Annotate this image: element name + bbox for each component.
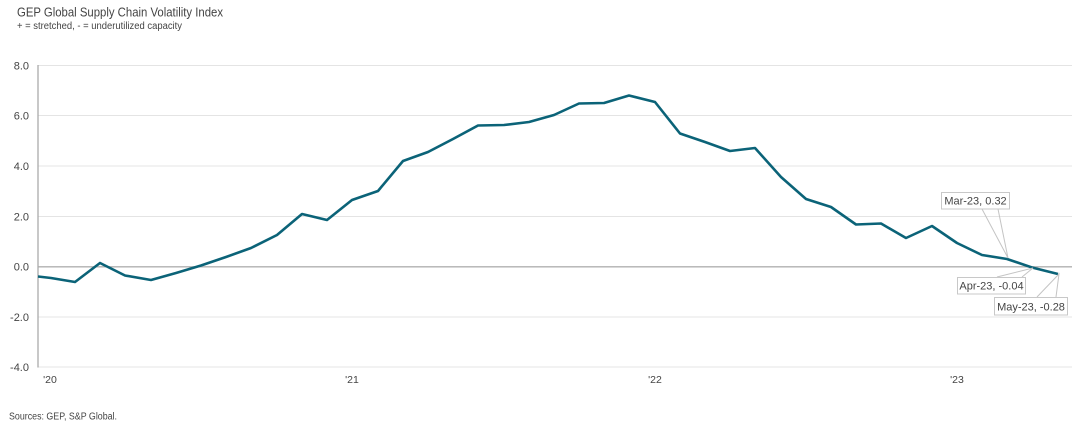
x axis labels: '23 <box>950 374 964 386</box>
y axis labels: 0.0 <box>14 262 29 274</box>
y axis labels: -4.0 <box>10 362 29 374</box>
y axis labels: 6.0 <box>14 110 29 122</box>
x axis labels <box>43 374 964 386</box>
y axis labels: 2.0 <box>14 212 29 224</box>
source note: Sources: GEP, S&P Global. <box>9 412 117 422</box>
y axis line <box>37 65 39 368</box>
x axis labels: '21 <box>345 374 359 386</box>
y axis labels: 8.0 <box>14 60 29 72</box>
callout: Apr-23 <box>958 268 1033 294</box>
callout: Mar-23 <box>942 192 1010 258</box>
callout: May-23: May-23, -0.28 <box>997 302 1065 314</box>
subtitle: + = stretched, - = underutilized capacity <box>17 21 182 32</box>
callout: Mar-23: Mar-23, 0.32 <box>944 196 1007 208</box>
x axis labels: '22 <box>648 374 662 386</box>
callout: Apr-23: Apr-23, -0.04 <box>959 280 1024 292</box>
x axis labels: '20 <box>43 374 57 386</box>
y axis labels <box>10 60 29 374</box>
index line series <box>38 96 1058 282</box>
y axis labels: -2.0 <box>10 312 29 324</box>
zero line <box>38 266 1072 268</box>
title: GEP Global Supply Chain Volatility Index <box>17 6 224 20</box>
y axis labels: 4.0 <box>14 161 29 173</box>
callout: May-23 <box>994 274 1068 315</box>
